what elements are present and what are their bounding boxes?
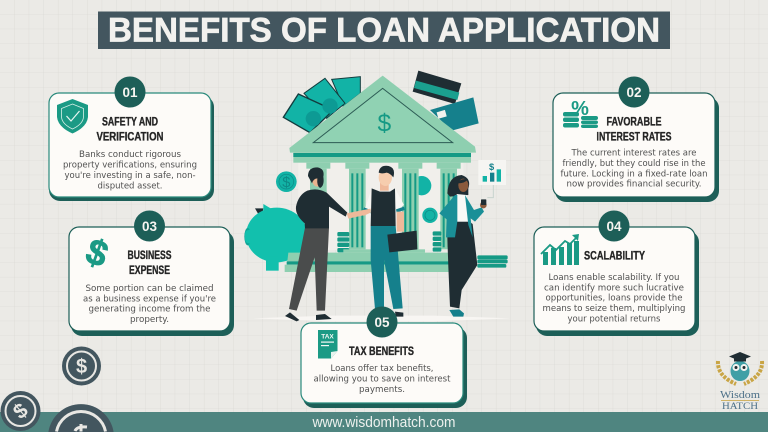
body text — [63, 149, 197, 190]
body text — [314, 363, 451, 394]
coin stacks — [337, 231, 508, 268]
chart hologram: $ — [489, 162, 495, 172]
body text: you're investing in a safe, non- — [64, 170, 196, 180]
badge 02 — [618, 76, 650, 108]
roof — [289, 76, 476, 163]
central illustration: bank and people — [244, 71, 510, 321]
heading: INTEREST RATES — [596, 132, 672, 144]
heading: EXPENSE — [129, 265, 170, 277]
bank cards — [413, 71, 479, 131]
panel: 01 safety and verification — [49, 76, 214, 201]
body text: future. Locking in a fixed-rate loan — [560, 168, 708, 178]
chart hologram — [478, 160, 506, 198]
person: man with beard — [285, 167, 365, 321]
piggy bank — [244, 204, 307, 271]
heading: FAVORABLE — [606, 116, 662, 128]
panel: 05 tax benefits — [301, 306, 467, 408]
panel: 02 favorable interest rates — [553, 76, 719, 202]
body text — [560, 148, 708, 188]
coins behind bank — [276, 171, 438, 223]
logo: wisdom hatch owl: HATCH — [722, 402, 758, 412]
icon: dollar sign: $ — [81, 230, 114, 275]
heading: BUSINESS — [128, 250, 172, 262]
icon: shield — [57, 99, 88, 134]
body text: as a business expense if you're — [83, 293, 216, 303]
body text: Some portion can be claimed — [86, 283, 214, 293]
person: woman with phone — [439, 175, 487, 317]
footer band — [0, 412, 768, 432]
body text: allowing you to save on interest — [314, 374, 451, 384]
badge 02: 02 — [626, 85, 642, 100]
badge 01 — [114, 76, 146, 108]
badge 05: 05 — [374, 315, 390, 330]
heading — [128, 250, 172, 277]
body text: payments. — [359, 384, 405, 394]
body text: now provides financial security. — [566, 178, 702, 188]
heading: SCALABILITY — [584, 250, 645, 262]
footer band: www.wisdomhatch.com — [312, 414, 456, 431]
body text — [83, 283, 216, 324]
logo: wisdom hatch owl — [718, 352, 762, 412]
body text: friendly, but they could rise in the — [562, 158, 706, 168]
icon: growth chart — [541, 234, 579, 265]
badge 05 — [366, 306, 398, 338]
badge 03: 03 — [142, 219, 157, 234]
icon: dollar coin tilted — [0, 391, 40, 431]
badge 04 — [598, 210, 630, 242]
title: BENEFITS OF LOAN APPLICATION — [108, 12, 660, 50]
icon: tax document: TAX — [321, 334, 334, 340]
floor — [253, 316, 510, 321]
heading: SAFETY AND — [102, 116, 158, 128]
coins behind bank: $ — [282, 175, 290, 191]
icon: dollar coin medium: $ — [76, 356, 87, 378]
body text: Banks conduct rigorous — [79, 149, 181, 159]
body text: Loans enable scalability. If you — [548, 272, 680, 282]
wall — [298, 163, 463, 250]
icon: percent and coins: % — [571, 98, 589, 120]
badge 03 — [134, 210, 165, 242]
body text: property verifications, ensuring — [63, 160, 197, 170]
body text: opportunities, loans provide the — [546, 293, 682, 303]
roof: $ — [377, 110, 391, 137]
plinth — [285, 249, 467, 272]
logo: wisdom hatch owl: Wisdom — [720, 390, 760, 401]
person: man with briefcase — [363, 166, 417, 317]
money bills — [283, 77, 360, 133]
body text: generating income from the — [88, 304, 210, 314]
icon: tax document — [318, 330, 338, 358]
body text: The current interest rates are — [570, 148, 696, 158]
body text: your potential returns — [568, 313, 660, 323]
badge 01: 01 — [122, 85, 138, 100]
heading — [596, 116, 672, 144]
body text: property. — [130, 314, 169, 324]
heading — [96, 116, 164, 144]
body text: means to seize them, multiplying — [542, 303, 686, 313]
body text — [542, 272, 686, 323]
body text: disputed asset. — [98, 180, 162, 190]
columns — [306, 163, 461, 249]
body text: Loans offer tax benefits, — [330, 363, 434, 373]
heading: TAX BENEFITS — [349, 346, 414, 358]
panel: 04 scalability — [534, 210, 699, 336]
icon: dollar coin medium — [62, 346, 101, 386]
panel: 03 business expense — [69, 210, 234, 336]
badge 04: 04 — [606, 219, 622, 234]
icon: percent and coins — [563, 98, 598, 128]
icon: dollar coin large — [48, 404, 114, 432]
icon: dollar coin tilted: $ — [9, 399, 33, 424]
body text: can identify more such lucrative — [544, 282, 684, 292]
heading: VERIFICATION — [96, 132, 164, 144]
